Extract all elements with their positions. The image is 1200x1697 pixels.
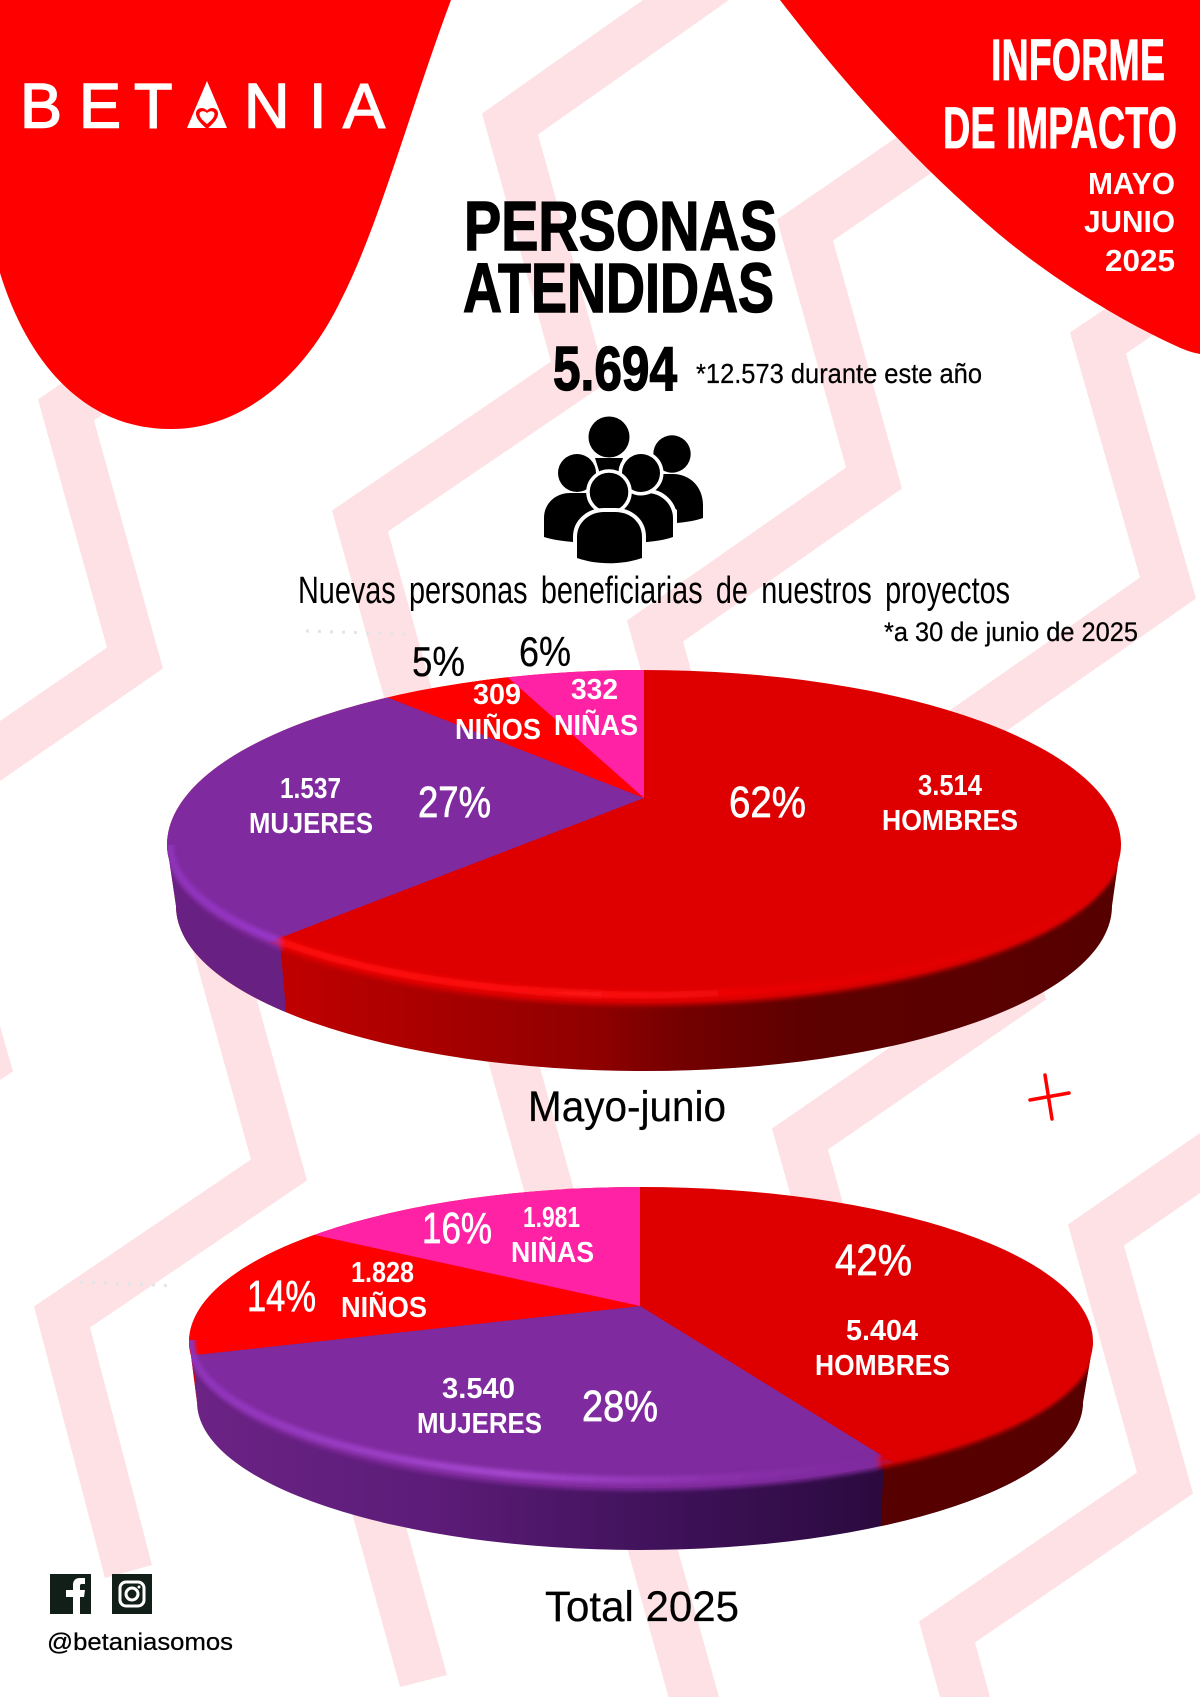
label: ninas: 1.981	[523, 1202, 580, 1234]
pie side wall	[169, 860, 1118, 1071]
label: 62 percent: 62%	[729, 778, 806, 827]
chart: May-June 3D pie	[167, 636, 1121, 1071]
label: ninos: NIÑOS	[455, 712, 541, 746]
note: date: *a 30 de junio de 2025	[884, 617, 1138, 647]
label: ninos: 1.828	[351, 1257, 414, 1289]
label: 6 percent: 6%	[519, 628, 571, 675]
icon: facebook	[50, 1574, 91, 1614]
label: ninos: NIÑOS	[341, 1290, 427, 1324]
pie side wall	[190, 1344, 1093, 1550]
pie rim highlight	[189, 1340, 1093, 1493]
label: ninos: 309	[473, 679, 521, 711]
heading: Personas atendidas: ATENDIDAS	[463, 249, 774, 327]
social handle: @betaniasomos	[47, 1629, 233, 1656]
header blob: top right red shape	[780, 0, 1200, 354]
label: hombres: HOMBRES	[815, 1350, 950, 1382]
label: ninos	[341, 1257, 427, 1324]
total number: 5.694	[553, 335, 677, 404]
pie top face slices	[167, 670, 1121, 1003]
icon: instagram	[112, 1574, 152, 1614]
header blob: top left red shape	[0, 0, 451, 429]
label: ninos	[455, 679, 541, 746]
heading: Personas atendidas	[463, 187, 777, 327]
icon: logo triangle A with heart	[187, 81, 227, 129]
label: ninas	[554, 674, 638, 742]
label: hombres: 3.514	[918, 770, 982, 802]
report title: 2025	[1105, 243, 1175, 278]
report title: MAYO	[1088, 166, 1175, 201]
logo: BETANIA: BETNIA	[20, 72, 385, 142]
label: ninas: 332	[571, 674, 618, 706]
report title: JUNIO	[1084, 204, 1175, 239]
label: mujeres: MUJERES	[417, 1408, 542, 1440]
pie top face slices	[189, 1187, 1093, 1488]
caption: Total 2025: Total 2025	[545, 1583, 739, 1631]
label: 14 percent: 14%	[247, 1272, 316, 1321]
label: mujeres: 3.540	[442, 1373, 515, 1405]
label: mujeres: 1.537	[280, 773, 341, 805]
label: ninas: NIÑAS	[511, 1235, 594, 1269]
label: hombres	[815, 1315, 950, 1382]
caption: Mayo-junio: Mayo-junio	[528, 1083, 726, 1131]
note: yearly total: *12.573 durante este año	[696, 358, 982, 389]
label: hombres	[882, 770, 1018, 837]
label: mujeres	[249, 773, 373, 840]
report title	[943, 28, 1177, 278]
label: 5 percent: 5%	[412, 638, 465, 685]
icon: red plus mark	[1030, 1075, 1069, 1119]
label: hombres: 5.404	[846, 1315, 918, 1347]
chart: total 2025 3D pie	[189, 1187, 1093, 1550]
label: mujeres	[417, 1373, 542, 1440]
icon: group of people	[544, 416, 703, 563]
heading: Personas atendidas: PERSONAS	[464, 187, 777, 265]
label: 27 percent: 27%	[418, 778, 491, 827]
label: ninas: NIÑAS	[554, 708, 638, 742]
label: mujeres: MUJERES	[249, 808, 373, 840]
label: ninas	[511, 1202, 594, 1269]
label: 42 percent: 42%	[835, 1236, 912, 1285]
label: hombres: HOMBRES	[882, 805, 1018, 837]
label: 16 percent: 16%	[422, 1204, 492, 1253]
pie rim highlight	[167, 842, 1121, 1008]
label: 28 percent: 28%	[582, 1382, 658, 1431]
